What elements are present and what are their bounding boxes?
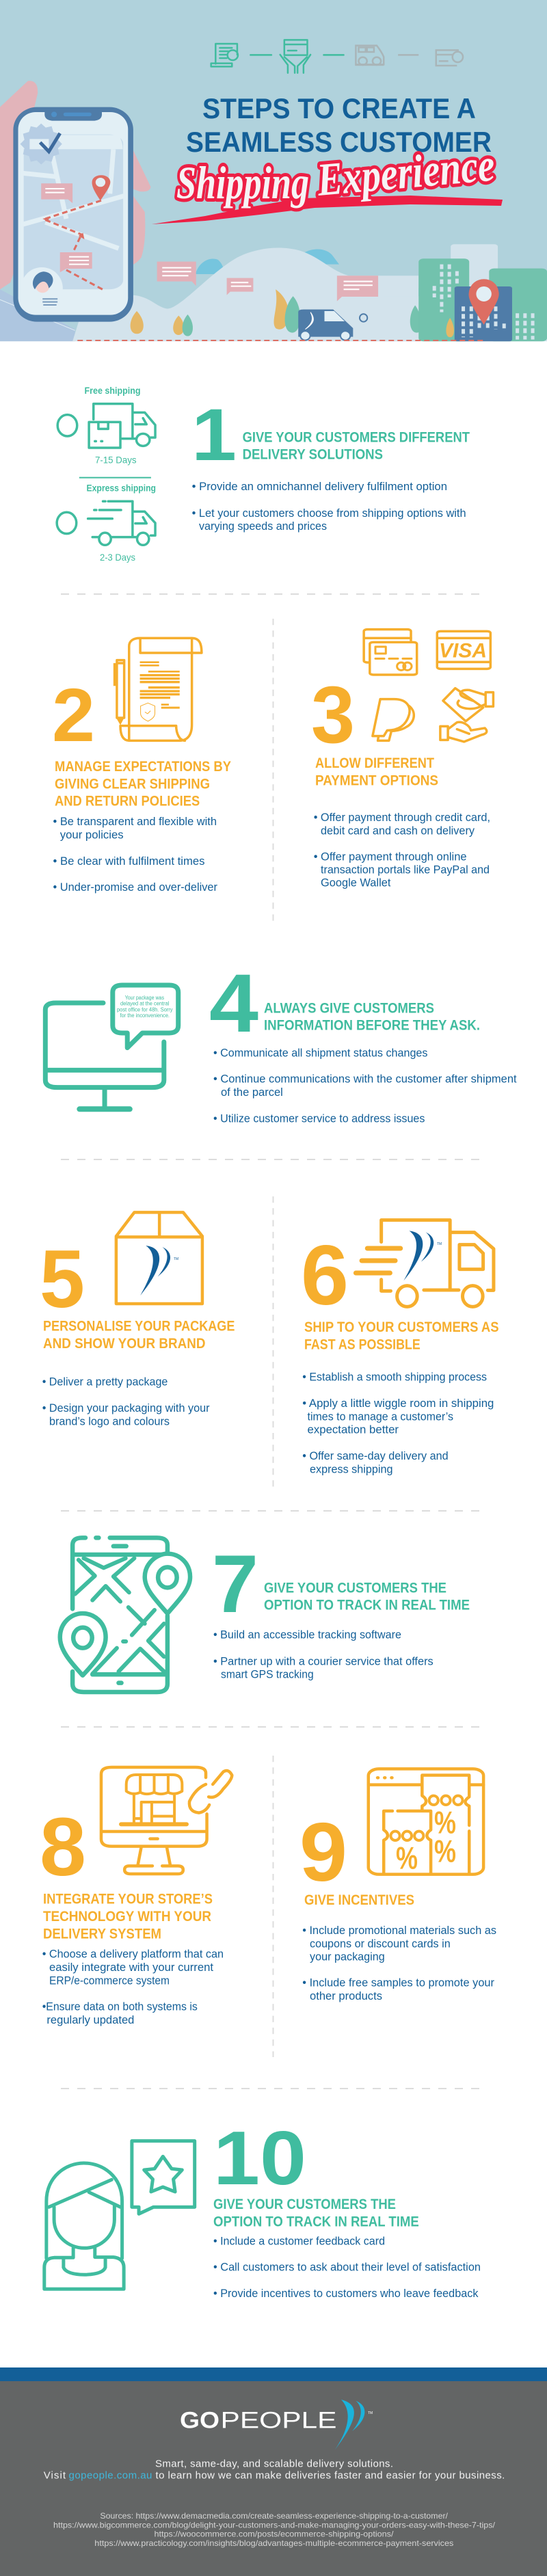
heading: PAYMENT OPTIONS — [315, 773, 438, 789]
icon: customer with star review — [44, 2141, 195, 2289]
bullet list: • Continue communications with the customer after shipment — [213, 1073, 517, 1086]
number 2: 2 — [52, 673, 95, 757]
bullet list: • Under-promise and over-deliver — [53, 881, 217, 894]
bullet list: coupons or discount cards in — [310, 1937, 451, 1950]
bullet list: • Call customers to ask about their level of satisfaction — [213, 2262, 481, 2274]
panel: hero header — [0, 0, 547, 341]
heading: GIVING CLEAR SHIPPING — [55, 776, 210, 792]
bullet list: • Communicate all shipment status changes — [213, 1047, 428, 1059]
labels: shipping options: 7-15 Days — [95, 454, 137, 465]
heading: OPTION TO TRACK IN REAL TIME — [264, 1598, 470, 1613]
message text: post office for 48h. Sorry — [117, 1006, 172, 1012]
panel: step 7 — [60, 1538, 470, 1692]
bullet list: expectation better — [308, 1424, 399, 1436]
bullet list — [302, 1371, 494, 1475]
heading: ALWAYS GIVE CUSTOMERS — [264, 1001, 434, 1017]
heading: GIVE INCENTIVES — [304, 1892, 414, 1908]
sources: https://www.bigcommerce.com/blog/delight-your-customers-and-make-managing-your-orders-easy-with-these-7-tips/ — [53, 2520, 496, 2530]
bullet list: • Design your packaging with your — [42, 1402, 210, 1414]
logo: GoPeople: PEOPLE — [220, 2408, 336, 2434]
bullet list — [213, 2235, 481, 2300]
heading: AND RETURN POLICIES — [55, 794, 200, 809]
bullet list: • Be transparent and flexible with — [53, 816, 217, 828]
panel: step 2 — [52, 638, 231, 894]
message text: for the inconvenience. — [120, 1012, 170, 1019]
logo: GoPeople: TM — [368, 2411, 373, 2415]
heading: GIVE YOUR CUSTOMERS THE — [264, 1580, 446, 1596]
heading: GIVE YOUR CUSTOMERS THE — [213, 2197, 396, 2212]
bullet list: • Include free samples to promote your — [302, 1977, 494, 1989]
bullet list: • Include a customer feedback card — [213, 2235, 385, 2247]
panel: step 1 — [57, 385, 470, 563]
bullet list: • Deliver a pretty package — [42, 1376, 168, 1388]
heading — [55, 759, 231, 809]
number 8: 8 — [40, 1800, 86, 1893]
bullet list — [192, 481, 466, 533]
bullet list: • Let your customers choose from shipping options with — [192, 507, 466, 520]
bullet list — [302, 1924, 496, 2002]
number 3: 3 — [311, 670, 355, 760]
sources: https://woocommerce.com/posts/ecommerce-shipping-options/ — [155, 2530, 394, 2539]
bullet list: brand’s logo and colours — [49, 1415, 170, 1427]
trademark: TM — [174, 1257, 178, 1261]
number 5: 5 — [40, 1233, 85, 1325]
heading: FAST AS POSSIBLE — [304, 1337, 421, 1352]
title: STEPS TO CREATE A — [202, 92, 476, 124]
icon: branded box — [116, 1212, 202, 1304]
bullet list — [314, 811, 490, 889]
bullet list: • Offer payment through online — [314, 850, 467, 863]
heading: INTEGRATE YOUR STORE’S — [43, 1892, 213, 1907]
message text: Your package was — [125, 995, 164, 1001]
heading: MANAGE EXPECTATIONS BY — [55, 759, 231, 775]
tagline — [44, 2458, 505, 2482]
bullet list — [53, 816, 217, 894]
card logo: VISA — [439, 640, 487, 662]
bullet list: • Include promotional materials such as — [302, 1924, 496, 1937]
tagline: Visit — [44, 2470, 66, 2482]
heading — [264, 1001, 480, 1034]
icon: shipping options — [57, 404, 155, 545]
bullet list: • Offer payment through credit card, — [314, 811, 490, 824]
heading: DELIVERY SYSTEM — [43, 1926, 161, 1942]
number 7: 7 — [212, 1538, 258, 1630]
bullet list: varying speeds and prices — [199, 520, 327, 533]
icon: monitor with message — [45, 985, 178, 1109]
bullet list — [213, 1047, 517, 1125]
sources: https://www.practicology.com/insights/blog/advantages-multiple-ecommerce-payment-services — [94, 2538, 453, 2548]
script title: Shipping — [176, 157, 309, 209]
heading: GIVE YOUR CUSTOMERS DIFFERENT — [243, 430, 470, 446]
bullet list: ERP/e-commerce system — [49, 1974, 170, 1987]
heading: DELIVERY SOLUTIONS — [243, 447, 383, 463]
bullet list: • Build an accessible tracking software — [213, 1629, 401, 1641]
bullet list: transaction portals like PayPal and — [321, 864, 490, 876]
panel: footer — [0, 2367, 547, 2576]
panel: step 4 — [45, 956, 517, 1125]
panel: step 3 — [311, 630, 493, 889]
heading: SHIP TO YOUR CUSTOMERS AS — [304, 1319, 499, 1335]
bullet list: your policies — [60, 829, 124, 842]
bullet list — [213, 1629, 433, 1681]
bullet list: Google Wallet — [321, 877, 391, 889]
logo: GoPeople: GO — [180, 2408, 219, 2434]
icon: policy document and pen — [114, 638, 202, 740]
trademark: TM — [437, 1242, 442, 1246]
panel: step 9 — [299, 1769, 496, 2002]
message text — [117, 995, 172, 1019]
sources: Sources: https://www.demacmedia.com/create-seamless-experience-shipping-to-a-customer/ — [100, 2511, 449, 2521]
panel: step 8 — [40, 1767, 232, 2026]
bullet list: •Ensure data on both systems is — [42, 2001, 198, 2013]
labels: shipping options: Free shipping — [85, 385, 141, 396]
logo: GoPeople — [180, 2400, 373, 2450]
percent signs: % — [434, 1833, 456, 1868]
bullet list: easily integrate with your current — [49, 1961, 213, 1974]
icon: payment methods — [364, 630, 493, 742]
bullet list: express shipping — [310, 1463, 392, 1475]
labels: shipping options: 2-3 Days — [100, 552, 135, 563]
progress icons — [211, 40, 463, 73]
heading — [304, 1319, 499, 1352]
tagline: to learn how we can make deliveries faster and easier for your business. — [156, 2470, 505, 2482]
icon: online store and chain link — [101, 1767, 232, 1874]
heading — [243, 430, 470, 463]
bullet list — [42, 1948, 224, 2026]
bullet list: • Provide incentives to customers who leave feedback — [213, 2287, 479, 2300]
illustration: city, hills and delivery van — [0, 81, 547, 341]
heading: PERSONALISE YOUR PACKAGE — [43, 1319, 235, 1334]
number 4: 4 — [209, 956, 258, 1049]
heading: OPTION TO TRACK IN REAL TIME — [213, 2214, 419, 2229]
heading: ALLOW DIFFERENT — [315, 755, 434, 771]
labels: shipping options — [85, 385, 156, 563]
brush stroke — [152, 196, 503, 224]
heading: TECHNOLOGY WITH YOUR — [43, 1909, 211, 1924]
icon: discount coupons in browser — [369, 1769, 483, 1875]
heading — [43, 1319, 235, 1352]
heading: INFORMATION BEFORE THEY ASK. — [264, 1018, 480, 1034]
heading — [43, 1892, 213, 1942]
percent signs: % — [434, 1805, 456, 1840]
bullet list — [42, 1376, 210, 1427]
title: SEAMLESS CUSTOMER — [186, 126, 492, 158]
sources — [53, 2511, 496, 2548]
number 9: 9 — [299, 1806, 347, 1899]
percent signs — [396, 1805, 456, 1875]
heading — [315, 755, 438, 789]
title — [186, 92, 492, 158]
bullet list: times to manage a customer’s — [308, 1410, 453, 1423]
panel: step 10 — [44, 2116, 481, 2300]
tagline: Smart, same-day, and scalable delivery solutions. — [155, 2458, 393, 2469]
bullet list: • Be clear with fulfilment times — [53, 855, 205, 868]
number 10: 10 — [213, 2116, 306, 2201]
number 6: 6 — [301, 1229, 349, 1323]
heading — [213, 2197, 419, 2229]
bullet list: • Choose a delivery platform that can — [42, 1948, 224, 1961]
number 1: 1 — [191, 393, 237, 476]
bullet list: • Apply a little wiggle room in shipping — [302, 1397, 494, 1410]
bullet list: your packaging — [310, 1951, 385, 1963]
bullet list: other products — [310, 1990, 382, 2002]
bullet list: of the parcel — [221, 1086, 283, 1099]
bullet list: • Provide an omnichannel delivery fulfilment option — [192, 481, 447, 493]
bullet list: • Offer same-day delivery and — [302, 1450, 449, 1462]
heading: AND SHOW YOUR BRAND — [43, 1336, 205, 1352]
heading — [264, 1580, 470, 1613]
bullet list: • Utilize customer service to address issues — [213, 1112, 425, 1125]
bullet list: regularly updated — [46, 2014, 134, 2026]
icon: phone map with pins — [60, 1538, 190, 1692]
bullet list: • Establish a smooth shipping process — [302, 1371, 487, 1383]
bullet list: • Partner up with a courier service that offers — [213, 1655, 433, 1667]
panel: step 5 — [40, 1212, 235, 1427]
panel: step 6 — [301, 1220, 499, 1475]
bullet list: smart GPS tracking — [221, 1669, 314, 1681]
icon: fast truck — [356, 1220, 494, 1306]
labels: shipping options: Express shipping — [86, 483, 156, 494]
script title — [176, 139, 496, 209]
message text: delayed at the central — [120, 1001, 170, 1007]
percent signs: % — [396, 1840, 418, 1875]
bullet list: debit card and cash on delivery — [321, 824, 475, 837]
tagline: gopeople.com.au — [68, 2470, 152, 2482]
script title: Experience — [315, 139, 496, 206]
